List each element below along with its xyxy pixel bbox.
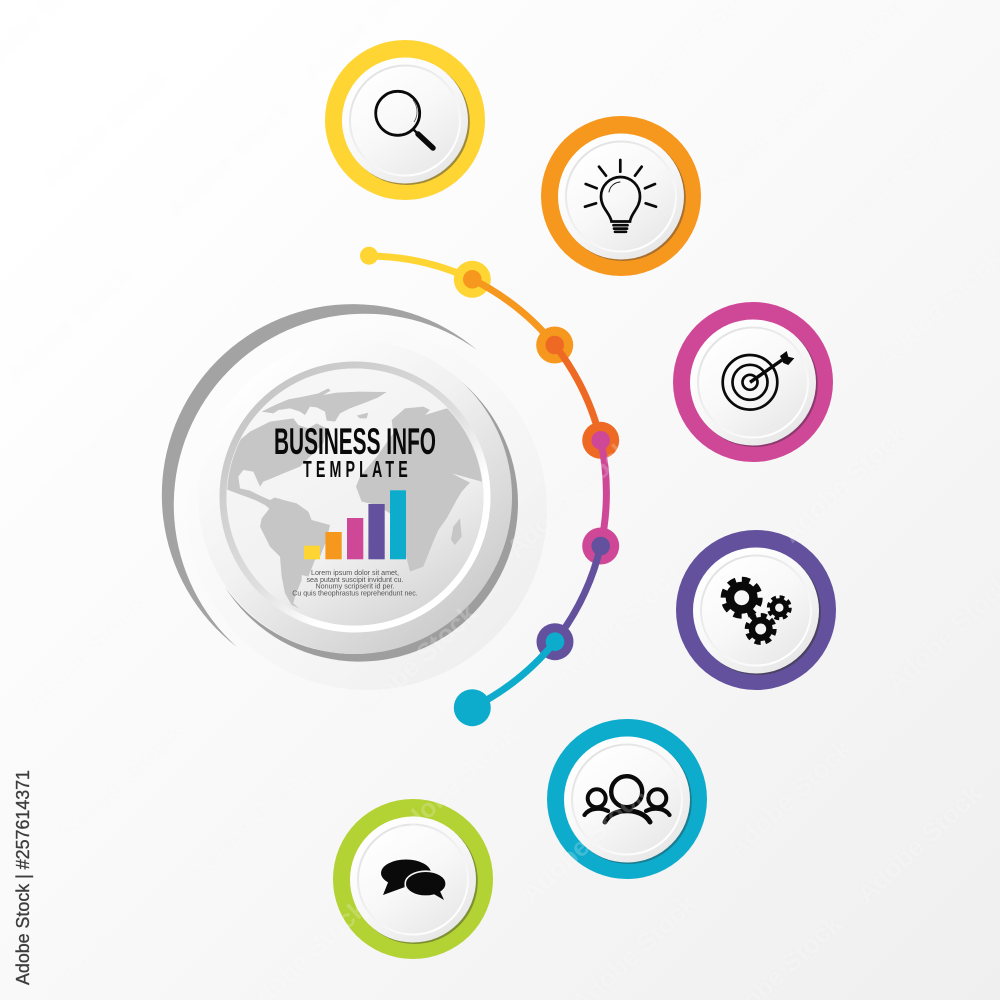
body text — [292, 570, 418, 597]
timeline arc with nodes — [360, 247, 619, 726]
icon: gears — [724, 580, 790, 643]
icon: light bulb — [585, 160, 656, 232]
watermark pattern: Adobe Stock — [31, 378, 168, 509]
subtitle: TEMPLATE — [303, 458, 408, 483]
watermark pattern: Adobe Stock — [776, 418, 913, 549]
watermark pattern: Adobe Stock — [211, 213, 348, 344]
watermark pattern: Adobe Stock — [851, 778, 988, 909]
watermark pattern: Adobe Stock — [346, 598, 483, 729]
watermark pattern: Adobe Stock — [516, 778, 653, 909]
watermark pattern: Adobe Stock — [501, 433, 638, 564]
bar chart — [304, 490, 406, 559]
watermark pattern: Adobe Stock — [16, 588, 153, 719]
watermark pattern: Adobe Stock — [181, 758, 318, 889]
body text: Lorem ipsum dolor sit amet, — [311, 570, 399, 577]
button: gears (purple) — [676, 530, 836, 690]
body text: sea putant suscipit invidunt cu. — [306, 577, 404, 584]
watermark pattern: Adobe Stock — [161, 93, 298, 224]
icon: people — [584, 776, 670, 822]
watermark pattern: Adobe Stock — [721, 733, 858, 864]
watermark pattern: Adobe Stock — [51, 718, 188, 849]
watermark pattern: Adobe Stock — [699, 70, 836, 201]
lower-right grey crescent — [225, 373, 518, 662]
soft halo — [187, 330, 547, 690]
button: idea (orange) — [541, 116, 701, 276]
watermark pattern: Adobe Stock — [551, 558, 688, 689]
watermark pattern: Adobe Stock — [386, 718, 523, 849]
upper-left grey crescent — [162, 304, 477, 647]
button: target (magenta) — [673, 302, 833, 462]
watermark pattern: Adobe Stock — [36, 63, 173, 194]
body text: Cu quis theophrastus reprehendunt nec. — [292, 590, 418, 597]
icon: target and arrow — [723, 351, 794, 410]
button: team (blue) — [547, 719, 707, 879]
icon: speech bubbles — [381, 860, 446, 900]
title: BUSINESS INFO — [274, 421, 436, 462]
stock id text: Adobe Stock | #257614371 — [12, 770, 33, 985]
button: search (yellow) — [325, 40, 485, 200]
watermark pattern: Adobe Stock — [1, 258, 138, 389]
icon: magnifying glass — [376, 91, 433, 148]
outer disc — [198, 340, 512, 654]
inner ring — [223, 365, 487, 629]
body text: Nonumy scripserit id per. — [316, 584, 395, 591]
globe disc — [226, 368, 484, 626]
central globe panel — [162, 304, 547, 690]
watermark pattern: Adobe Stock — [826, 111, 963, 242]
world map — [217, 388, 493, 608]
button: chat (green) — [333, 799, 493, 959]
